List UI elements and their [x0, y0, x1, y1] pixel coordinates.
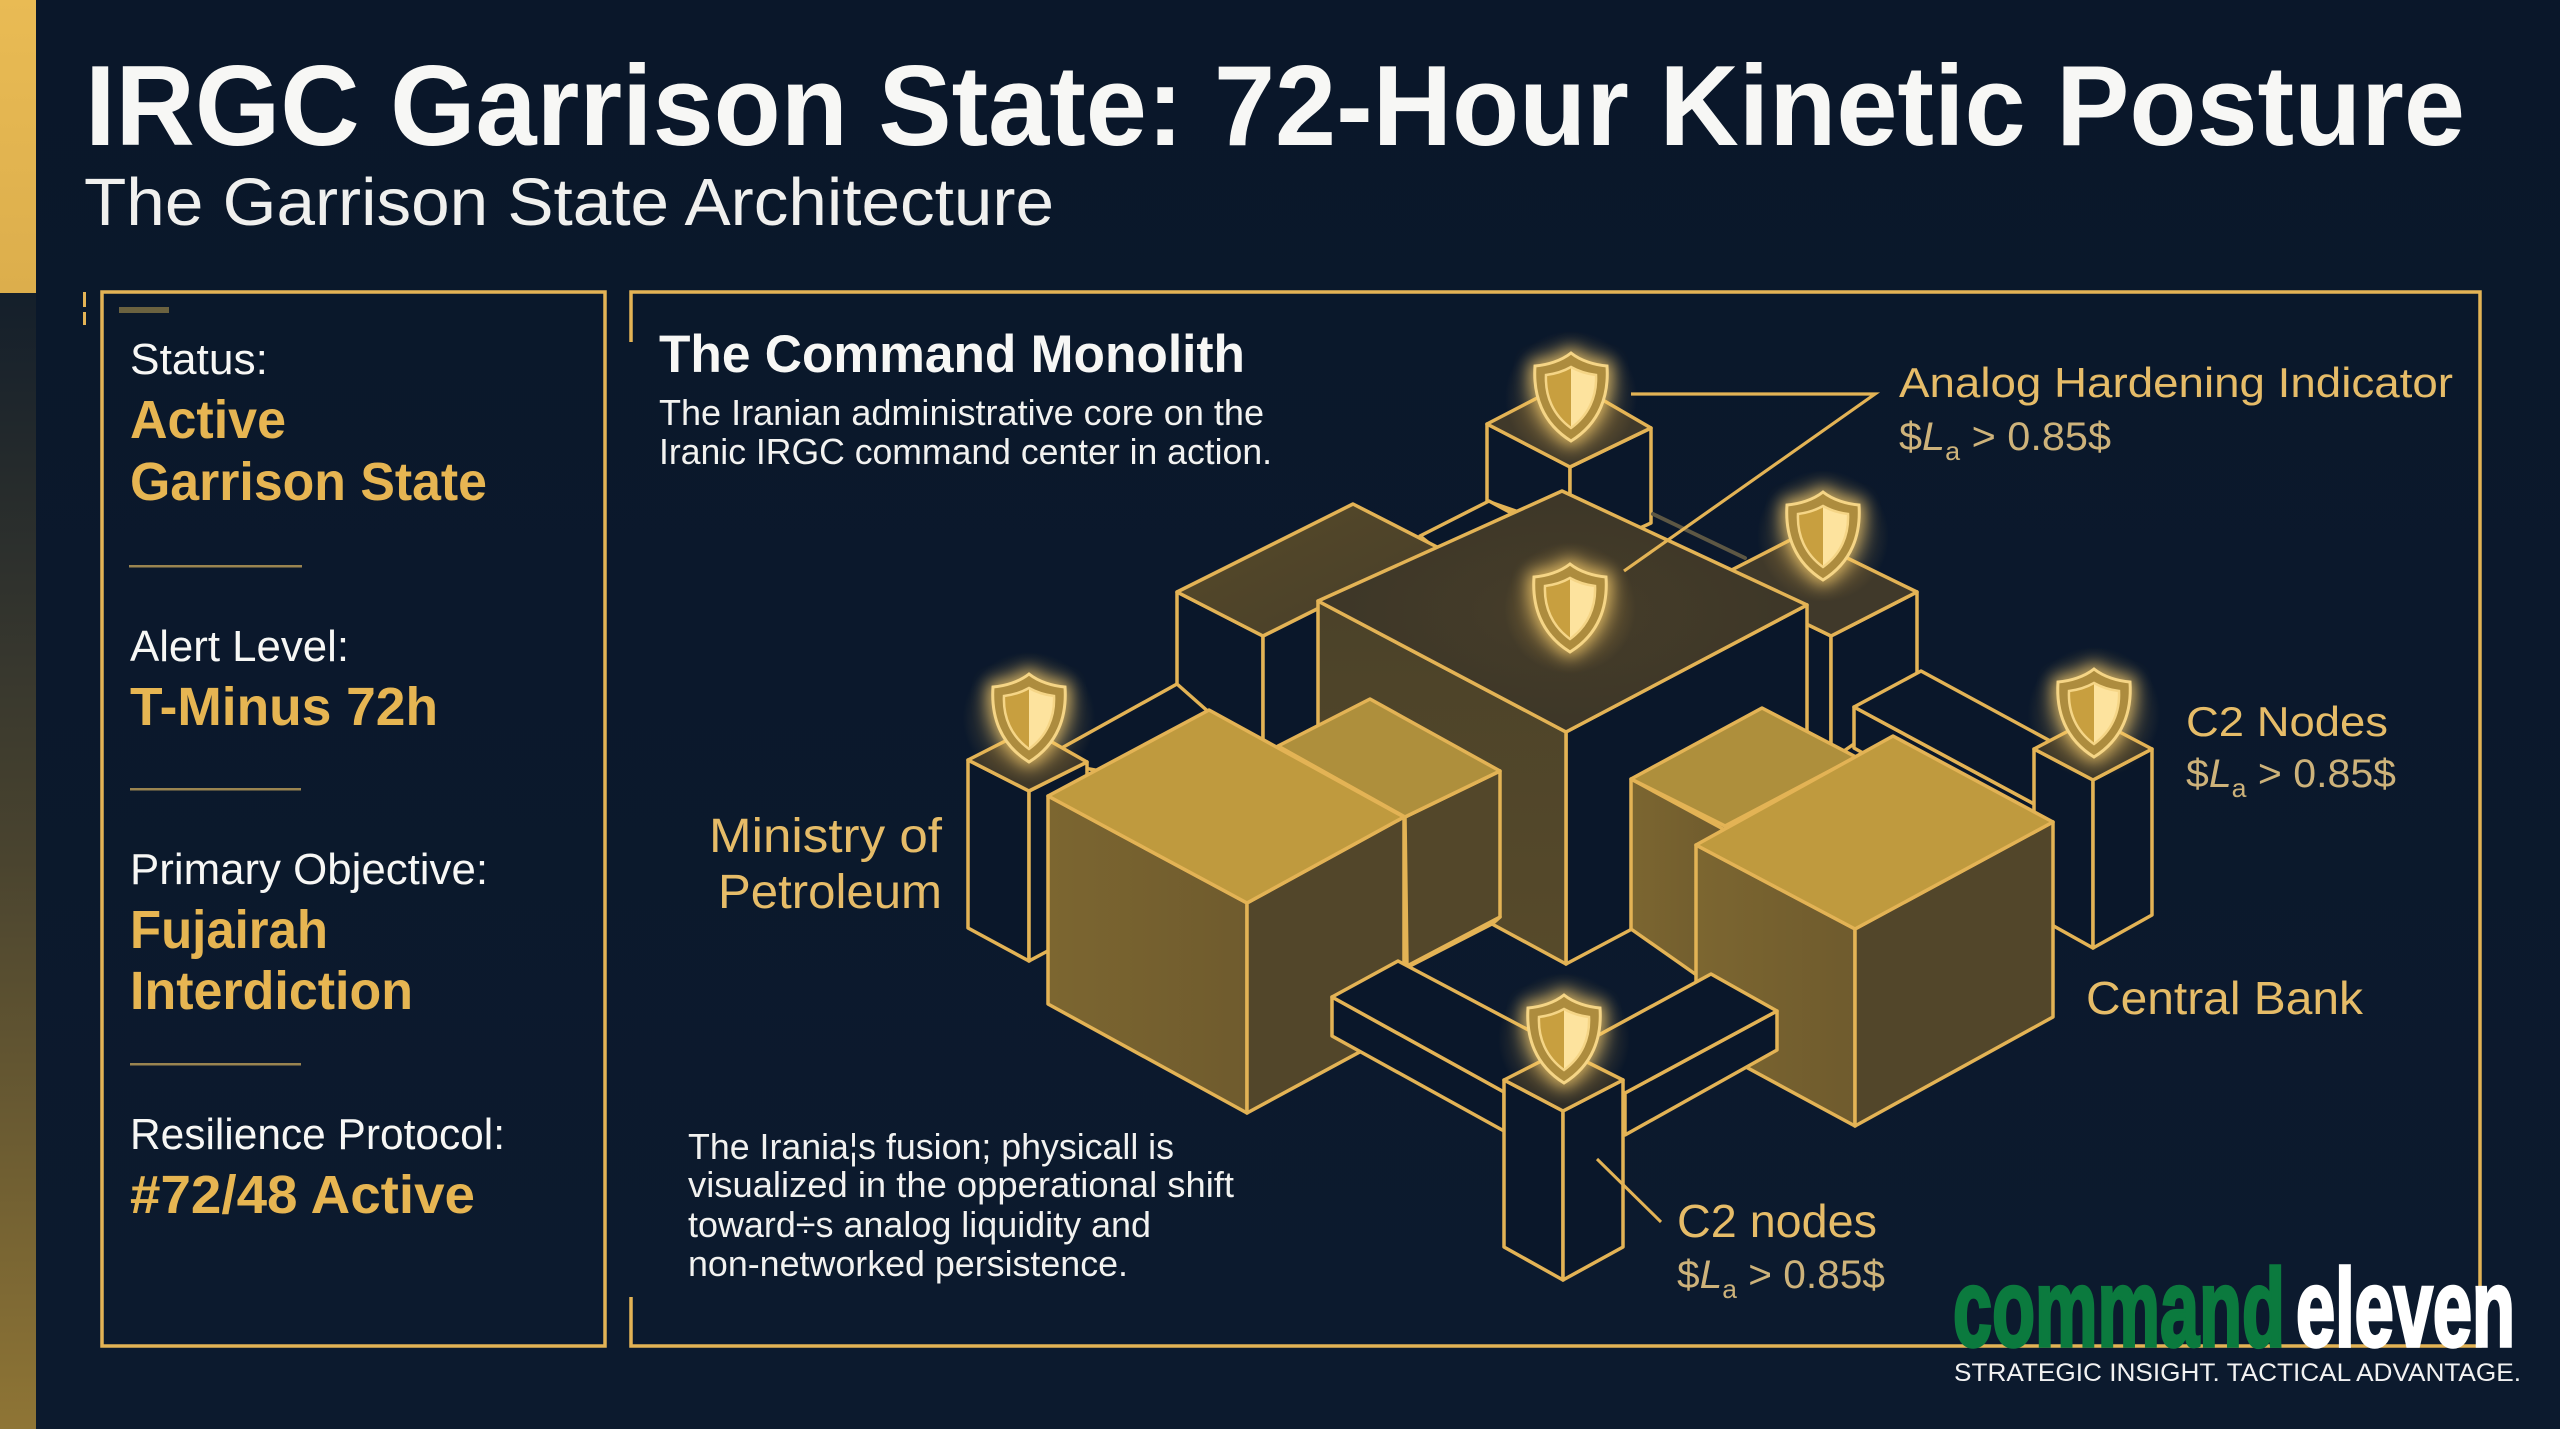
label: central bank: Central Bank — [2086, 972, 2364, 1024]
label: analog hardening indicator: a — [1945, 436, 1961, 466]
status item: Status: — [130, 335, 268, 384]
status item: Garrison State — [130, 452, 487, 512]
heading: the command monolith: The Command Monolith — [659, 325, 1245, 384]
label: ministry of petroleum — [709, 810, 943, 919]
status item: Active — [130, 390, 286, 450]
low block: right rear — [1854, 671, 2100, 850]
label: ministry of petroleum: Petroleum — [718, 866, 942, 919]
cube: central bank — [1696, 736, 2053, 1126]
label: C2 nodes right — [2186, 698, 2396, 803]
tower: C2 nodes front — [1504, 1050, 1623, 1280]
cube: ministry of petroleum — [1048, 710, 1404, 1113]
icon: shield monolith — [1504, 542, 1636, 674]
label: analog hardening indicator — [1899, 359, 2453, 466]
icon: shield rear right — [1757, 470, 1889, 602]
logo: commandeleven: STRATEGIC INSIGHT. TACTICAL ADVANTAGE. — [1954, 1359, 2521, 1387]
primary objective item: Primary Objective: — [130, 845, 488, 894]
label: analog hardening indicator: $L — [1899, 415, 1944, 459]
logo: commandeleven: command — [1953, 1247, 2285, 1370]
primary objective item: Interdiction — [130, 961, 413, 1021]
alert level item: T-Minus 72h — [130, 677, 438, 737]
title: IRGC Garrison State: 72-Hour Kinetic Posture — [85, 43, 2465, 170]
label: C2 nodes right: $L — [2186, 752, 2231, 796]
tower: C2 nodes right — [2034, 718, 2152, 948]
label: C2 nodes right: a — [2232, 773, 2247, 803]
label: analog hardening indicator: > 0.85$ — [1960, 415, 2111, 459]
panel: command monolith frame — [631, 292, 2480, 1346]
icon: shield left tower — [963, 652, 1095, 784]
primary objective item — [130, 845, 488, 1021]
central monolith block — [1318, 491, 1807, 964]
alert level item — [130, 622, 438, 737]
label: C2 nodes right: C2 Nodes — [2186, 698, 2388, 745]
subtitle: The Garrison State Architecture — [84, 165, 1054, 240]
isometric diagram: command monolith blocks — [968, 381, 2152, 1280]
text block: fusion description: visualized in the opperational shift — [688, 1164, 1234, 1205]
label: C2 nodes front: a — [1722, 1274, 1737, 1304]
text block: monolith description: The Iranian administrative core on the — [659, 392, 1264, 433]
label: C2 nodes right: > 0.85$ — [2247, 752, 2396, 796]
alert level item: Alert Level: — [130, 622, 349, 671]
cube: middle right — [1631, 708, 1856, 995]
accent bar: left edge — [0, 0, 36, 1429]
resilience protocol item — [130, 1110, 505, 1225]
label: ministry of petroleum: Ministry of — [709, 810, 943, 863]
text block: fusion description — [688, 1126, 1234, 1284]
leader line: C2 nodes — [1597, 1159, 1661, 1222]
label: C2 nodes front: > 0.85$ — [1737, 1253, 1885, 1297]
tower: left — [968, 729, 1087, 961]
bar: front left — [1332, 961, 1570, 1131]
text block: monolith description — [659, 392, 1272, 472]
text block: fusion description: The Irania¦s fusion; physicall is — [688, 1126, 1174, 1167]
label: C2 nodes front — [1677, 1195, 1885, 1304]
bar: front right — [1560, 974, 1777, 1135]
status item — [130, 335, 487, 512]
text block: fusion description: toward÷s analog liquidity and — [688, 1204, 1151, 1245]
resilience protocol item: #72/48 Active — [130, 1165, 475, 1225]
resilience protocol item: Resilience Protocol: — [130, 1110, 505, 1159]
label: C2 nodes front: C2 nodes — [1677, 1195, 1877, 1247]
panel: status sidebar — [83, 292, 605, 1346]
text block: monolith description: Iranic IRGC command center in action. — [659, 431, 1272, 472]
block: back left — [1040, 504, 1439, 780]
icon: shield top tower — [1505, 331, 1637, 463]
icon: shield right tower — [2028, 647, 2160, 779]
icon: shield front tower — [1498, 973, 1630, 1105]
primary objective item: Fujairah — [130, 900, 328, 960]
leader line: analog hardening indicator — [1624, 394, 1875, 571]
tower: top rear — [1487, 381, 1651, 560]
cube: middle left — [1278, 699, 1500, 966]
label: C2 nodes front: $L — [1677, 1253, 1722, 1297]
text block: fusion description: non-networked persistence. — [688, 1243, 1128, 1284]
label: analog hardening indicator: Analog Hardening Indicator — [1899, 359, 2453, 406]
tower: rear right — [1714, 535, 1917, 760]
